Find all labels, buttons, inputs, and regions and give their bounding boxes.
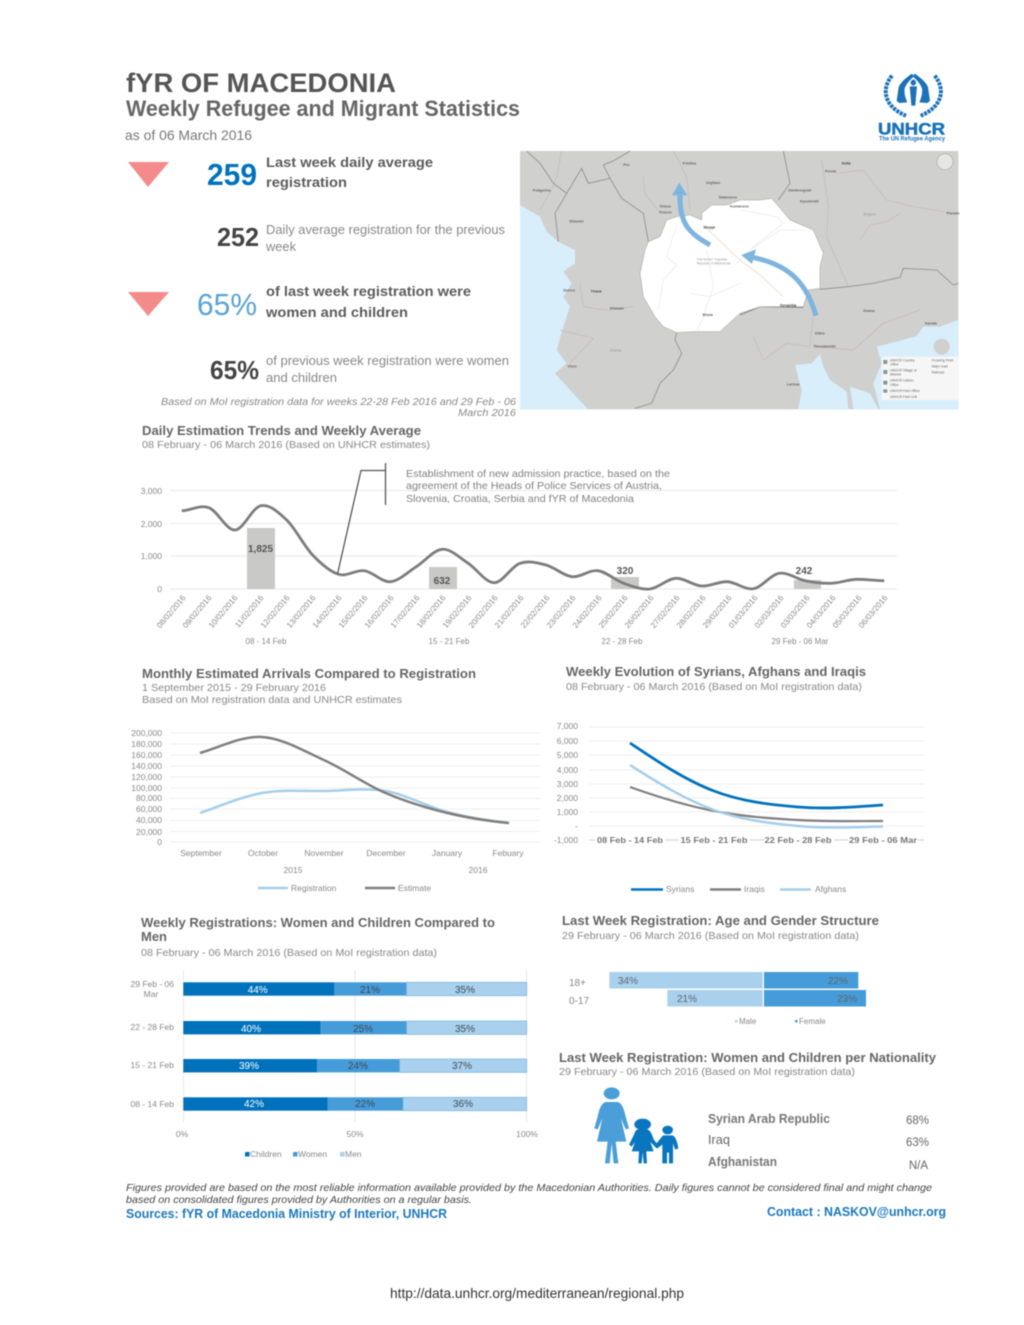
bar values: 21% [360, 985, 380, 996]
date axis labels: 12/02/2016 [259, 593, 292, 630]
pyramid values: 23% [837, 994, 857, 1005]
map labels: Prizren [659, 210, 672, 214]
heading: 08 February - 06 March 2016 (Based on MoI registration data) [566, 681, 862, 693]
y axis labels: 60,000 [136, 804, 162, 814]
text: previous average [265, 222, 505, 254]
y axis labels [131, 728, 162, 847]
text: last week average [266, 154, 433, 190]
UNHCR logo: The UN Refugee Agency [879, 136, 946, 142]
weekly average bars [247, 528, 821, 589]
map country labels: Bulgaria [863, 212, 876, 216]
nationality table: Iraq [708, 1133, 730, 1147]
date axis labels: 11/02/2016 [233, 593, 266, 630]
y axis labels: 2,000 [557, 793, 578, 803]
legend: Male [739, 1017, 757, 1026]
x axis labels: December [366, 848, 406, 858]
x axis labels [595, 835, 918, 845]
age labels: 18+ [569, 978, 586, 989]
pyramid values: 21% [677, 994, 697, 1005]
national borders [527, 151, 958, 408]
date axis labels: 17/02/2016 [389, 593, 422, 630]
legend: Syrians [666, 884, 694, 894]
x axis labels: September [180, 848, 222, 858]
callout leader [338, 463, 386, 574]
heading [559, 1050, 937, 1078]
legend: Female [799, 1017, 826, 1026]
heading: Daily Estimation Trends and Weekly Average [142, 423, 421, 438]
legend [631, 884, 846, 894]
heading [142, 423, 430, 451]
bar value labels: 242 [796, 566, 813, 577]
x axis labels: 2015 [284, 865, 303, 875]
nationality table: Afghanistan [708, 1155, 777, 1169]
date axis labels: 25/02/2016 [597, 593, 630, 630]
title: Weekly Refugee and Migrant Statistics [126, 96, 520, 121]
nationality table: 63% [906, 1137, 929, 1149]
y axis labels: 180,000 [131, 739, 162, 749]
y axis labels: 120,000 [131, 772, 162, 782]
map [520, 151, 961, 409]
map labels: Larissa [787, 382, 800, 386]
footnote: based on consolidated figures provided by Authorities on a regular basis. [126, 1194, 472, 1206]
date axis labels: 03/03/2016 [779, 593, 812, 630]
y axis labels: 1,000 [557, 807, 578, 817]
pyramid values: 34% [618, 976, 638, 987]
x axis labels: 22 Feb - 28 Feb [764, 835, 832, 845]
key figure 65 percent: 65% [197, 287, 257, 322]
date axis labels: 15/02/2016 [337, 593, 370, 630]
map labels: Shkoder [569, 220, 585, 224]
legend: Men [345, 1149, 362, 1159]
map country labels: Albania [610, 348, 621, 352]
heading: Last Week Registration: Women and Children per Nationality [559, 1050, 937, 1065]
note [161, 396, 516, 419]
legend: Afghans [815, 884, 846, 894]
date axis labels: 28/02/2016 [675, 593, 708, 630]
map labels: Elbasan [610, 306, 624, 310]
map legend: UNHCR Field Unit [890, 395, 917, 399]
bar values: 35% [455, 985, 475, 996]
map labels: Kumanovo [730, 204, 750, 208]
legend: Women [298, 1149, 327, 1159]
heading: Based on MoI registration data and UNHCR estimates [142, 694, 402, 706]
map labels: Pernik [825, 170, 837, 174]
y axis labels: 5,000 [557, 750, 578, 760]
percent axis: 0% [176, 1129, 189, 1139]
callout: Slovenia, Croatia, Serbia and fYR of Macedonia [406, 493, 634, 505]
line: Afghans [630, 765, 883, 828]
y axis labels [554, 721, 578, 845]
panel: monthly arrivals [131, 666, 540, 893]
heading [566, 664, 866, 693]
heading: Weekly Registrations: Women and Children Compared to [141, 915, 495, 930]
bar values: 36% [453, 1099, 473, 1110]
y axis labels: 6,000 [557, 736, 578, 746]
date axis labels: 01/03/2016 [727, 593, 760, 630]
nationality table: N/A [909, 1160, 928, 1172]
panel: weekly evolution [554, 664, 924, 894]
callout: agreement of the Heads of Police Services of Austria, [406, 480, 662, 492]
map labels: Kyustendil [800, 200, 819, 204]
map labels: Sofia [842, 162, 852, 166]
category labels: 08 - 14 Feb [131, 1099, 174, 1109]
heading: Weekly Evolution of Syrians, Afghans and Iraqis [566, 664, 866, 679]
panel: daily estimation [141, 423, 897, 646]
map labels: Skopje [703, 226, 715, 230]
heading [142, 666, 476, 706]
bar values [239, 985, 475, 1110]
date axis labels: 23/02/2016 [545, 593, 578, 630]
icon: down triangle [128, 162, 169, 187]
map labels: Bitola [703, 313, 714, 317]
heading: Monthly Estimated Arrivals Compared to Registration [142, 666, 476, 681]
date axis labels: 27/02/2016 [649, 593, 682, 630]
daily trend line [183, 505, 883, 589]
age labels: 0-17 [569, 996, 589, 1007]
y axis labels: 140,000 [131, 761, 162, 771]
bar values: 37% [452, 1061, 472, 1072]
heading: 29 February - 06 March 2016 (Based on MoI registration data) [562, 930, 859, 942]
y axis labels: - [575, 821, 578, 831]
line: Syrians [630, 743, 883, 808]
map legend: Crossing Point [932, 358, 953, 362]
nationality table: Syrian Arab Republic [708, 1112, 830, 1126]
title [126, 68, 520, 121]
panel: women and children per nationality [559, 1050, 937, 1172]
date axis labels: 24/02/2016 [571, 593, 604, 630]
week labels: 08 - 14 Feb [246, 637, 287, 646]
y axis labels: 3,000 [141, 486, 162, 496]
date axis labels: 06/03/2016 [857, 593, 890, 630]
heading [562, 913, 879, 942]
date axis labels: 26/02/2016 [623, 593, 656, 630]
map country labels: Republic of Macedonia [697, 262, 731, 266]
x axis labels: 2016 [469, 865, 488, 875]
map labels: Tirana [591, 290, 603, 294]
y axis labels: 160,000 [131, 750, 162, 760]
map legend: Major road [932, 364, 948, 368]
legend: Iraqis [744, 884, 765, 894]
stacked bars [183, 982, 527, 1111]
date line: as of 06 March 2016 [125, 127, 252, 143]
contact: Contact : NASKOV@unhcr.org [767, 1205, 946, 1219]
x axis labels: 29 Feb - 06 Mar [849, 835, 918, 845]
heading: 29 February - 06 March 2016 (Based on MoI registration data) [559, 1066, 855, 1078]
text: previous women and children [266, 353, 509, 385]
heading: Men [141, 929, 167, 944]
map legend: UNHCR Liaison [890, 379, 914, 383]
y axis labels: 7,000 [557, 721, 578, 731]
y axis labels: 100,000 [131, 783, 162, 793]
text: women and children: of last week registration were [266, 283, 471, 299]
map labels: Pec [623, 163, 630, 167]
map labels: Dimitrovgrad [788, 189, 811, 193]
week labels: 22 - 28 Feb [602, 637, 643, 646]
y axis labels: 1,000 [141, 551, 162, 561]
map labels: Pristina [683, 161, 697, 165]
arrow: northbound route [672, 183, 710, 245]
date axis labels: 18/02/2016 [415, 593, 448, 630]
date axis labels: 04/03/2016 [805, 593, 838, 630]
footnote [126, 1182, 932, 1206]
date axis labels: 29/02/2016 [701, 593, 734, 630]
map legend: Mission [890, 373, 901, 377]
roads on neighbouring land [540, 151, 953, 363]
note: March 2016 [458, 407, 516, 419]
y axis labels: 2,000 [141, 519, 162, 529]
week labels: 15 - 21 Feb [429, 637, 470, 646]
week labels: 29 Feb - 06 Mar [772, 637, 829, 646]
pyramid values: 22% [828, 976, 848, 987]
nationality table: 68% [906, 1115, 929, 1127]
map legend: Office [890, 363, 899, 367]
map legend [882, 357, 958, 400]
map labels: Durres [563, 288, 575, 292]
title: fYR OF MACEDONIA [126, 68, 396, 98]
y axis labels: 3,000 [557, 779, 578, 789]
x axis labels: 08 Feb - 14 Feb [597, 835, 663, 845]
map labels [533, 161, 961, 386]
icon: down triangle [128, 292, 169, 316]
footnote: Figures provided are based on the most reliable information available provided by the Macedonian Authorities. Daily figures cannot be considered final and might change [126, 1182, 932, 1194]
panel: weekly registrations [131, 915, 538, 1159]
text: previous women and children: of previous week registration were women [266, 353, 509, 368]
percent axis: 50% [346, 1129, 364, 1139]
date axis labels: 10/02/2016 [207, 593, 240, 630]
category labels: 15 - 21 Feb [131, 1060, 174, 1070]
text: previous average: week [265, 239, 296, 254]
map legend: UNHCR Field Office [890, 389, 920, 393]
legend: Children [250, 1149, 282, 1159]
bar values: 35% [455, 1024, 475, 1035]
date axis labels: 02/03/2016 [753, 593, 786, 630]
heading: Last Week Registration: Age and Gender Structure [562, 913, 879, 928]
legend [258, 883, 431, 893]
map labels: Gevgelija [780, 304, 797, 308]
bar values: 42% [244, 1099, 264, 1110]
x axis labels: January [432, 848, 463, 858]
UNHCR logo [878, 74, 946, 142]
line: registration [200, 789, 509, 823]
callout [406, 468, 670, 505]
pyramid values [618, 976, 857, 1005]
map: Aegean sea [795, 320, 958, 409]
date axis labels: 08/02/2016 [155, 593, 188, 630]
age labels [569, 978, 589, 1007]
y axis labels: 0 [157, 584, 162, 594]
date axis labels: 16/02/2016 [363, 593, 396, 630]
map labels: Thessaloniki [813, 344, 835, 348]
category labels: Mar [144, 989, 158, 999]
y axis labels: 200,000 [131, 728, 162, 738]
page url: http://data.unhcr.org/mediterranean/regional.php [390, 1285, 684, 1301]
key figure previous 65 percent: 65% [210, 355, 259, 385]
map labels: Kavala [925, 322, 938, 326]
line: estimate [200, 737, 509, 823]
text: previous women and children: and children [266, 370, 337, 385]
UNHCR logo: UNHCR [878, 120, 945, 138]
date axis labels: 14/02/2016 [311, 593, 344, 630]
map legend: UNHCR Village of [890, 368, 917, 372]
bar values: 39% [239, 1061, 259, 1072]
text: women and children: women and children [265, 304, 408, 320]
sources: Sources: fYR of Macedonia Ministry of Interior, UNHCR [126, 1207, 447, 1221]
macedonia territory [640, 198, 823, 333]
category labels: 22 - 28 Feb [131, 1022, 174, 1032]
heading: 08 February - 06 March 2016 (Based on UNHCR estimates) [142, 439, 430, 451]
date axis labels: 21/02/2016 [493, 593, 526, 630]
y axis labels: 40,000 [136, 815, 162, 825]
callout: Establishment of new admission practice, based on the [406, 468, 670, 480]
date axis labels: 05/03/2016 [831, 593, 864, 630]
text: women and children [265, 283, 471, 320]
arrow: entry route [741, 249, 816, 316]
legend [735, 1017, 826, 1026]
map labels: Kilkis [815, 331, 825, 335]
bar values: 25% [353, 1024, 373, 1035]
x axis labels: 15 Feb - 21 Feb [680, 835, 748, 845]
key figure 259: 259 [207, 157, 257, 192]
heading: 1 September 2015 - 29 February 2016 [142, 682, 326, 694]
date axis labels: 09/02/2016 [181, 593, 214, 630]
x axis labels: November [304, 848, 344, 858]
y axis labels: 20,000 [136, 827, 162, 837]
y axis labels: 0 [157, 837, 162, 847]
date axis labels: 19/02/2016 [441, 593, 474, 630]
x axis labels [180, 848, 524, 875]
legend: Registration [291, 883, 337, 893]
week labels [246, 637, 829, 646]
date axis labels: 20/02/2016 [467, 593, 500, 630]
map labels: Tabanovce [718, 196, 737, 200]
map labels: Vlore [568, 364, 577, 368]
date axis labels: 13/02/2016 [285, 593, 318, 630]
text: last week average: Last week daily average [266, 154, 433, 170]
x axis labels: Febuary [492, 848, 524, 858]
y axis labels: 80,000 [136, 793, 162, 803]
legend [245, 1149, 362, 1159]
line: Iraqis [630, 787, 883, 821]
map labels: Plovdiv [947, 212, 961, 216]
map labels: Tetovo [659, 204, 672, 208]
bar values: 22% [355, 1099, 375, 1110]
legend: Estimate [398, 883, 431, 893]
pyramid bars [609, 972, 866, 1006]
percent axis [176, 1129, 538, 1139]
y axis labels: 4,000 [557, 765, 578, 775]
map legend: UNHCR Country [890, 358, 915, 362]
bar value labels [248, 544, 813, 587]
bar values: 24% [348, 1061, 368, 1072]
heading [141, 915, 495, 959]
map labels: Podgorica [533, 189, 552, 193]
panel: age and gender [562, 913, 879, 1026]
y axis labels [141, 486, 162, 594]
bar value labels: 320 [617, 566, 634, 577]
bar values: 44% [248, 985, 268, 996]
category labels [131, 979, 174, 1109]
map legend: Office [890, 383, 899, 387]
percent axis: 100% [516, 1129, 538, 1139]
map labels: Drama [863, 309, 876, 313]
map labels: Gnjilane [706, 181, 720, 185]
nationality table [708, 1112, 929, 1172]
key figure 252: 252 [217, 222, 259, 252]
map legend: Railroad [932, 370, 944, 374]
bar value labels: 1,825 [248, 544, 273, 555]
icon: family [594, 1087, 678, 1163]
note: Based on MoI registration data for weeks 22-28 Feb 2016 and 29 Feb - 06 [161, 396, 516, 408]
bar value labels: 632 [434, 576, 451, 587]
date axis labels [155, 593, 890, 630]
map country labels [610, 212, 876, 352]
map: Adriatic sea [520, 205, 588, 409]
text: previous average: Daily average registration for the previous [266, 222, 505, 237]
category labels: 29 Feb - 06 [131, 979, 174, 989]
y axis labels: -1,000 [554, 835, 578, 845]
text: last week average: registration [266, 174, 347, 190]
x axis labels: October [248, 848, 278, 858]
date axis labels: 22/02/2016 [519, 593, 552, 630]
roads in macedonia [658, 210, 807, 332]
bar values: 40% [241, 1024, 261, 1035]
panel: key figures [128, 154, 516, 419]
map globe [937, 154, 953, 170]
heading: 08 February - 06 March 2016 (Based on MoI registration data) [141, 947, 437, 959]
map country labels: The former Yugoslav [697, 258, 728, 262]
